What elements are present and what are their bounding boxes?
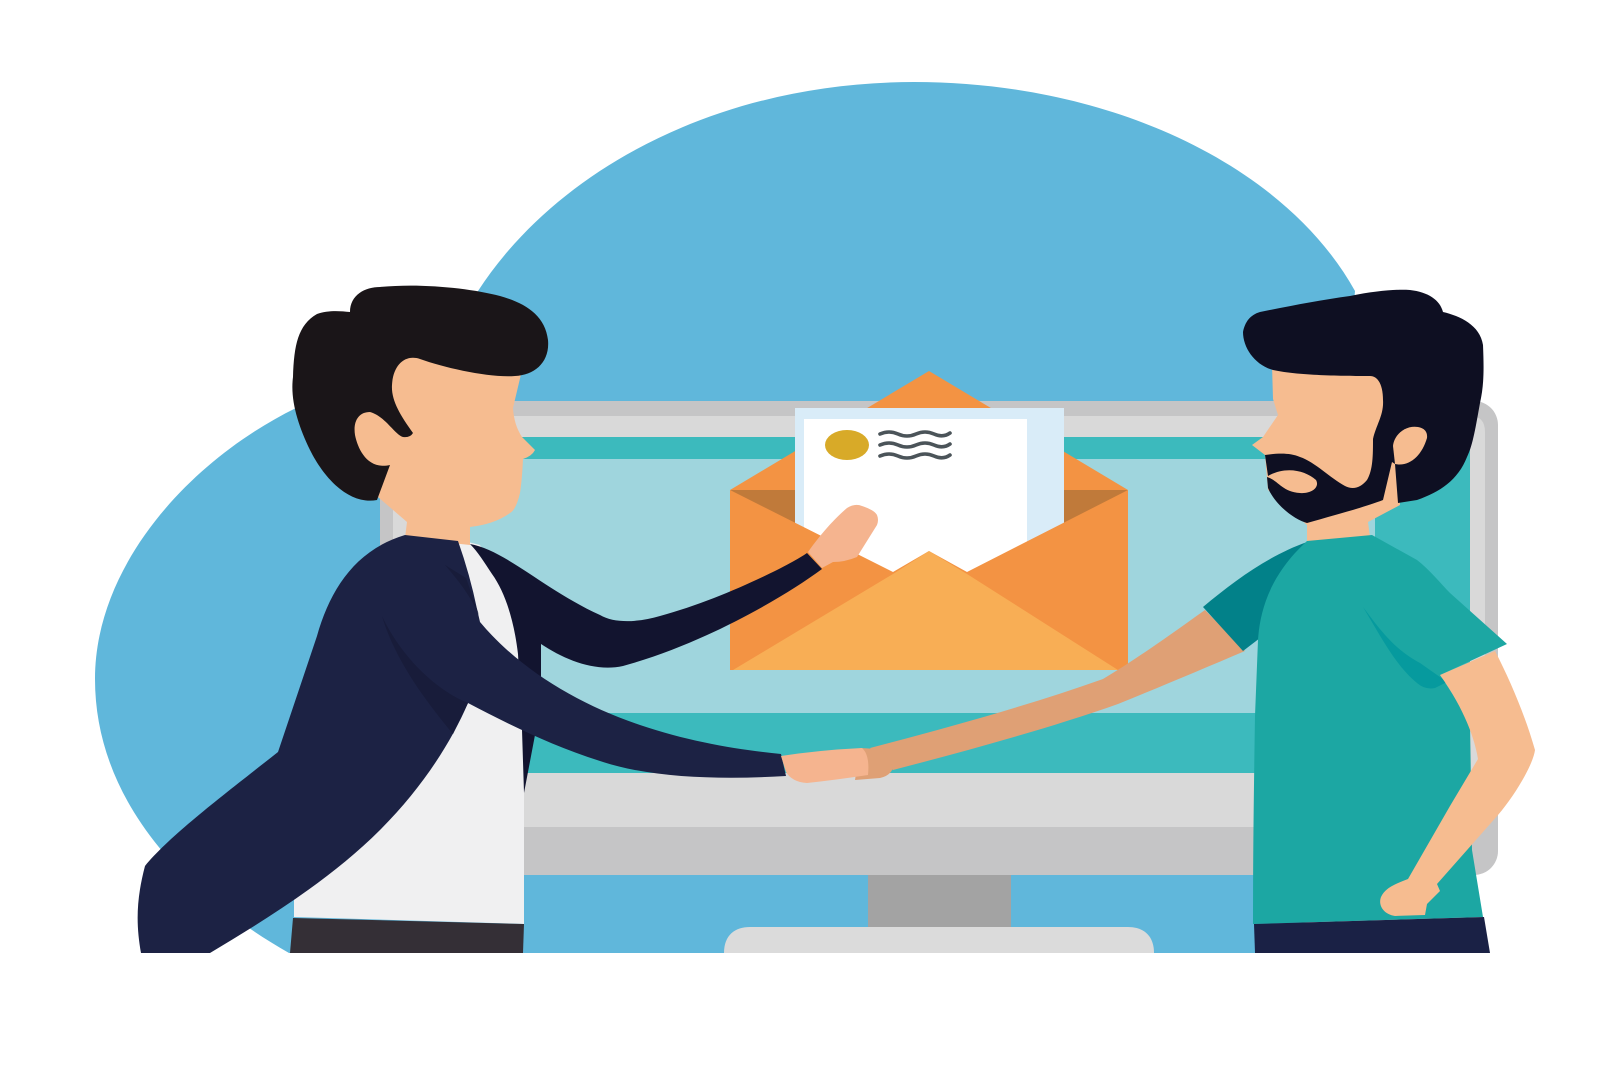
monitor (380, 401, 1498, 953)
screen light panel (407, 459, 1375, 713)
left man belt (290, 918, 524, 953)
monitor base (724, 927, 1154, 953)
left man ear (349, 404, 401, 472)
left man jacket shadow (382, 616, 468, 734)
right man ear (1393, 427, 1427, 464)
left man lapel shadow (445, 565, 479, 615)
letter white sheet (804, 419, 1027, 578)
envelope front flap (733, 551, 1118, 670)
right man extended arm (870, 610, 1245, 770)
left man white shirt (294, 540, 526, 924)
right man hand (855, 748, 893, 780)
envelope front (730, 490, 1128, 670)
left man back arm (470, 544, 822, 793)
monitor screen (407, 437, 1470, 773)
letter paper (795, 408, 1064, 578)
letter stamp (825, 430, 869, 460)
left man holding hand (808, 505, 878, 568)
monitor stand (868, 870, 1011, 930)
monitor chin shade (500, 827, 1300, 875)
monitor outer frame (380, 401, 1498, 875)
left man jacket and front arm (138, 535, 786, 953)
left man neck and face (378, 350, 535, 545)
right man shirt (1253, 535, 1507, 924)
letter wavy lines (880, 432, 950, 458)
right man (781, 290, 1535, 953)
envelope (730, 371, 1128, 670)
right man shirt fold (1363, 607, 1447, 688)
right man neck and face (1252, 365, 1400, 542)
right man bent arm (1380, 651, 1535, 916)
right man hair and beard (1243, 290, 1484, 523)
monitor inner bezel (393, 416, 1485, 827)
right man sleeve shade (1203, 542, 1307, 651)
envelope back flap (730, 371, 1128, 490)
left man handshake hand (781, 748, 868, 783)
envelope inner shade (730, 490, 1128, 620)
blue background blob (95, 82, 1355, 953)
left man (138, 286, 878, 953)
right man trousers (1254, 917, 1490, 953)
left man hair (292, 286, 548, 501)
